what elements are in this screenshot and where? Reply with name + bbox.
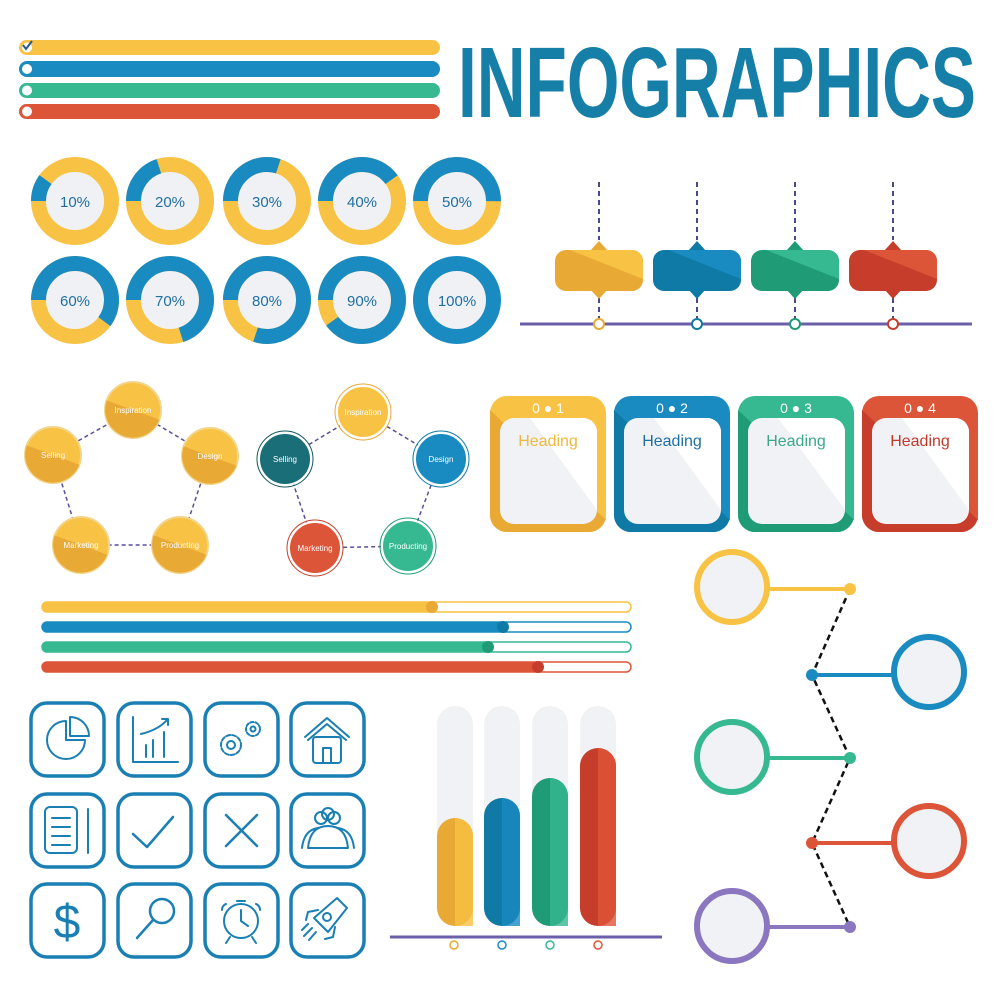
network: yellow pentagon: Inspiration	[115, 406, 151, 415]
network: yellow pentagon: Design	[198, 452, 222, 461]
card 2	[614, 396, 730, 532]
icon: rocket	[302, 898, 347, 940]
network: colored pentagon: Inspiration	[345, 408, 381, 417]
network: yellow pentagon: Marketing	[63, 541, 99, 550]
icon: house	[305, 718, 349, 763]
progress bars	[42, 601, 631, 673]
card 1: 0 ● 1	[532, 400, 564, 416]
heading cards	[490, 396, 978, 532]
donut charts: 80%	[252, 293, 282, 310]
timeline box 3	[751, 241, 839, 329]
donut charts: 10%	[60, 194, 90, 211]
timeline	[520, 182, 972, 329]
icon: magnifier	[137, 899, 174, 938]
icon: bar growth	[133, 717, 178, 762]
donut charts: 40%	[347, 194, 377, 211]
card 3	[738, 396, 854, 532]
network: colored pentagon: Selling	[273, 455, 297, 464]
icon: cross	[226, 815, 257, 846]
timeline box 2	[653, 241, 741, 329]
card 4: 0 ● 4	[904, 400, 936, 416]
network: colored pentagon: Marketing	[297, 544, 333, 553]
network: colored pentagon	[257, 384, 469, 576]
donut charts: 50%	[442, 194, 472, 211]
donut charts: 90%	[347, 293, 377, 310]
icon grid	[31, 703, 364, 957]
donut charts	[38, 164, 494, 336]
icon: group	[302, 808, 354, 848]
icon: pie chart	[47, 717, 89, 759]
network: yellow pentagon: Producting	[161, 541, 199, 550]
card 1	[490, 396, 606, 532]
bar chart	[390, 706, 662, 949]
donut charts: 20%	[155, 194, 185, 211]
card 3: 0 ● 3	[780, 400, 812, 416]
zigzag circles	[697, 552, 964, 961]
donut charts: 100%	[438, 293, 476, 310]
donut charts: 30%	[252, 194, 282, 211]
card 4: Heading	[890, 433, 950, 450]
timeline box 4	[849, 241, 937, 329]
card 3: Heading	[766, 433, 826, 450]
network: yellow pentagon	[25, 382, 238, 573]
card 2: Heading	[642, 433, 702, 450]
icon: gears	[221, 722, 260, 755]
card 1: Heading	[518, 433, 578, 450]
card 2: 0 ● 2	[656, 400, 688, 416]
donut charts: 60%	[60, 293, 90, 310]
icon: alarm clock	[222, 901, 260, 943]
header bars	[19, 40, 440, 119]
donut charts: 70%	[155, 293, 185, 310]
network: yellow pentagon: Selling	[41, 451, 65, 460]
timeline box 1	[555, 241, 643, 329]
icon: document	[45, 807, 88, 853]
network: colored pentagon: Producting	[389, 542, 427, 551]
network: colored pentagon: Design	[429, 455, 453, 464]
icon: dollar: $	[54, 896, 80, 949]
card 4	[862, 396, 978, 532]
icon: check	[133, 817, 173, 847]
